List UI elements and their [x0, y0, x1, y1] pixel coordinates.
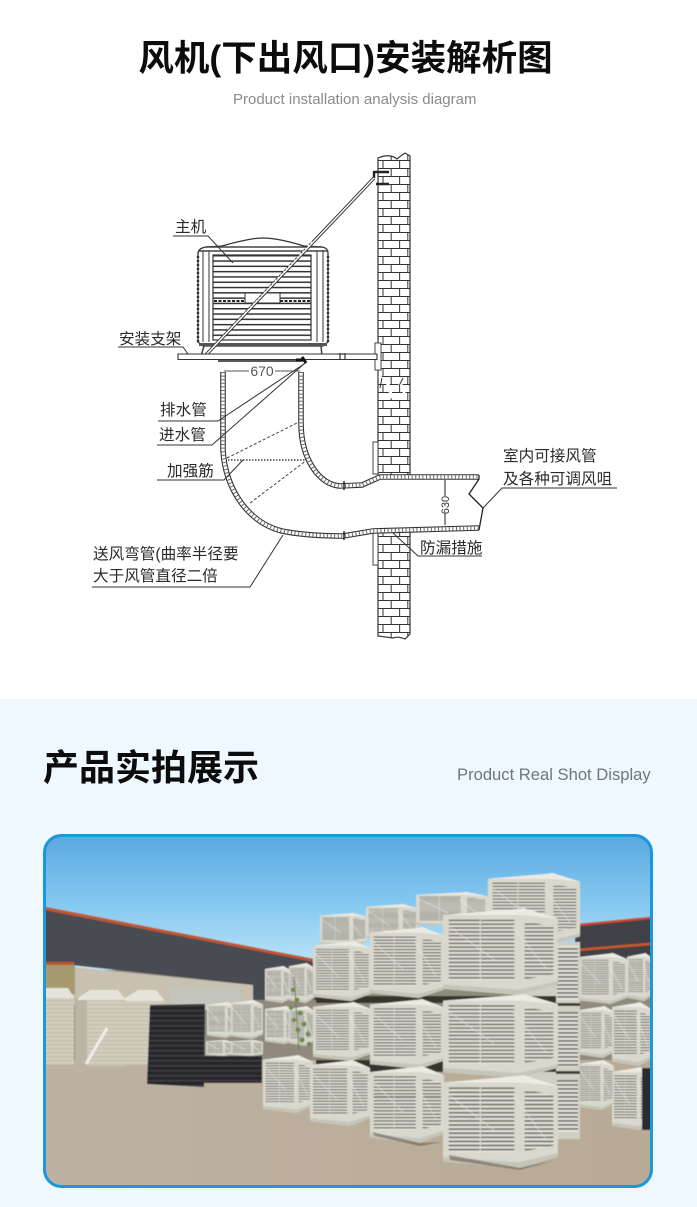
- gaps between stacked units: [316, 996, 556, 1072]
- black pallet stack: [204, 1056, 262, 1083]
- label: elbow duct note: 大于风管直径二倍: [93, 567, 218, 585]
- title: 风机(下出风口)安装解析图: [138, 38, 553, 78]
- main unit: [198, 238, 328, 356]
- dimension: 670: 670: [250, 363, 274, 379]
- sky: [44, 835, 652, 970]
- black cooler stack: [147, 1004, 205, 1087]
- dark warehouse building: [44, 906, 320, 1000]
- subtitle: Product installation analysis diagram: [233, 91, 476, 108]
- dimension: 630: 630: [440, 496, 452, 514]
- label: drain pipe: 排水管: [160, 401, 207, 419]
- panel: product photo section: [0, 699, 697, 1207]
- cast shadow: [372, 1132, 556, 1170]
- label: inlet pipe: 进水管: [159, 426, 206, 444]
- mounting bracket: [178, 353, 377, 363]
- label: mounting bracket: 安装支架: [119, 330, 181, 348]
- right rear column: [520, 942, 580, 1139]
- product photo: [43, 834, 653, 1188]
- diagonal brace: [203, 178, 374, 358]
- label: elbow duct note: 送风弯管(曲率半径要: [93, 545, 239, 563]
- label: main unit: 主机: [175, 218, 207, 236]
- small tree: [289, 977, 311, 1050]
- label: reinforcement rib: 加强筋: [167, 462, 214, 480]
- brick wall: [373, 153, 412, 639]
- section subtitle: Product Real Shot Display: [457, 765, 651, 784]
- section heading: 产品实拍展示: [43, 747, 259, 788]
- largest front column: [443, 908, 558, 1168]
- middle front column: [370, 927, 444, 1143]
- stacked white tanks: [44, 988, 165, 1066]
- leader lines: [92, 236, 617, 587]
- top row coolers: [320, 873, 580, 946]
- air duct elbow: [223, 372, 483, 540]
- yard backdrop: [44, 970, 652, 1065]
- label: leak prevention: 防漏措施: [420, 539, 483, 557]
- label: indoor duct note: 室内可接风管: [503, 447, 597, 465]
- label: indoor duct note: 及各种可调风咀: [503, 470, 612, 488]
- back row coolers: [206, 963, 314, 1113]
- photo frame: [44, 836, 652, 1186]
- dimension: 670: [224, 363, 300, 379]
- ground: [44, 1060, 652, 1188]
- installation diagram: [92, 152, 617, 640]
- right building: [574, 916, 650, 960]
- low wall and yellow shed: [44, 962, 253, 1010]
- left front column: [310, 941, 371, 1126]
- right side coolers: [578, 953, 653, 1130]
